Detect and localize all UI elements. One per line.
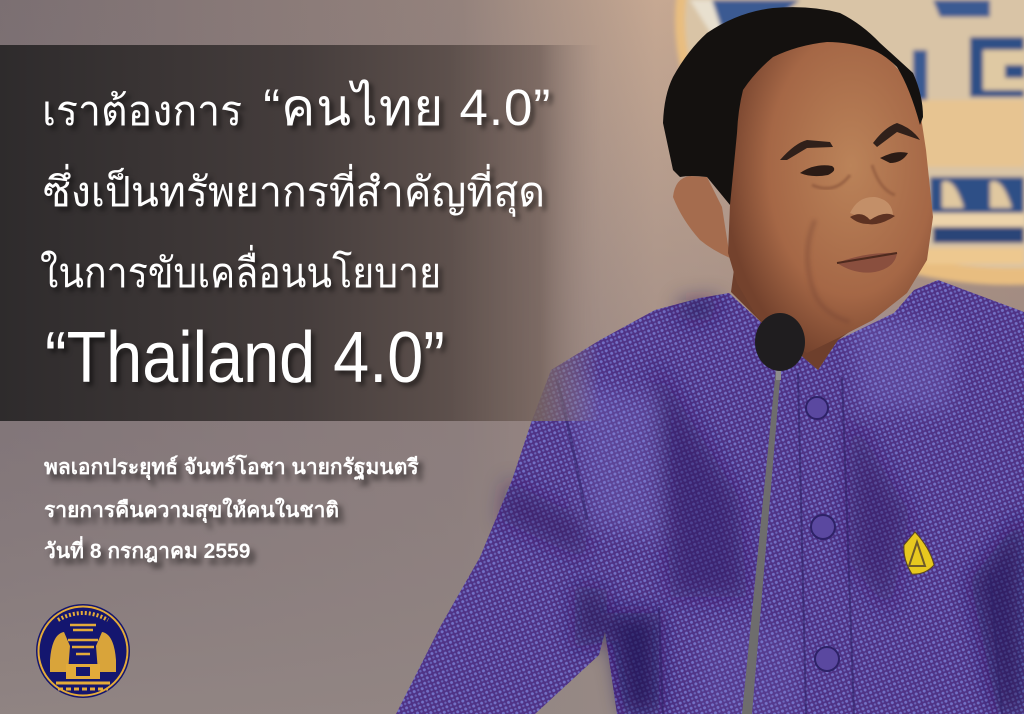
hair — [663, 7, 923, 205]
quote line 3: ในการขับเคลื่อนนโยบาย — [40, 250, 441, 296]
dark quote panel — [0, 45, 600, 421]
government seal — [36, 604, 130, 698]
attribution text — [44, 454, 426, 571]
gold pin — [904, 532, 934, 574]
quote line 2: ซึ่งเป็นทรัพยากรที่สำคัญที่สุด — [43, 169, 545, 215]
quote line 1: เราต้องการ “คนไทย 4.0” — [42, 79, 551, 136]
ear — [673, 176, 730, 258]
neck — [731, 262, 880, 370]
quote heading — [40, 79, 555, 398]
date: วันที่ 8 กรกฎาคม 2559 — [44, 540, 250, 563]
face — [728, 30, 933, 353]
microphone — [742, 313, 805, 714]
jacket folds and shading — [500, 297, 1024, 714]
background seal on wall — [675, 0, 1024, 285]
speaker name: พลเอกประยุทธ์ จันทร์โอชา นายกรัฐมนตรี — [44, 456, 419, 479]
facial features — [780, 123, 920, 322]
buttons — [806, 397, 839, 671]
programme: รายการคืนความสุขให้คนในชาติ — [44, 499, 339, 522]
quote line 4: “Thailand 4.0” — [45, 318, 445, 398]
jacket — [396, 280, 1024, 714]
